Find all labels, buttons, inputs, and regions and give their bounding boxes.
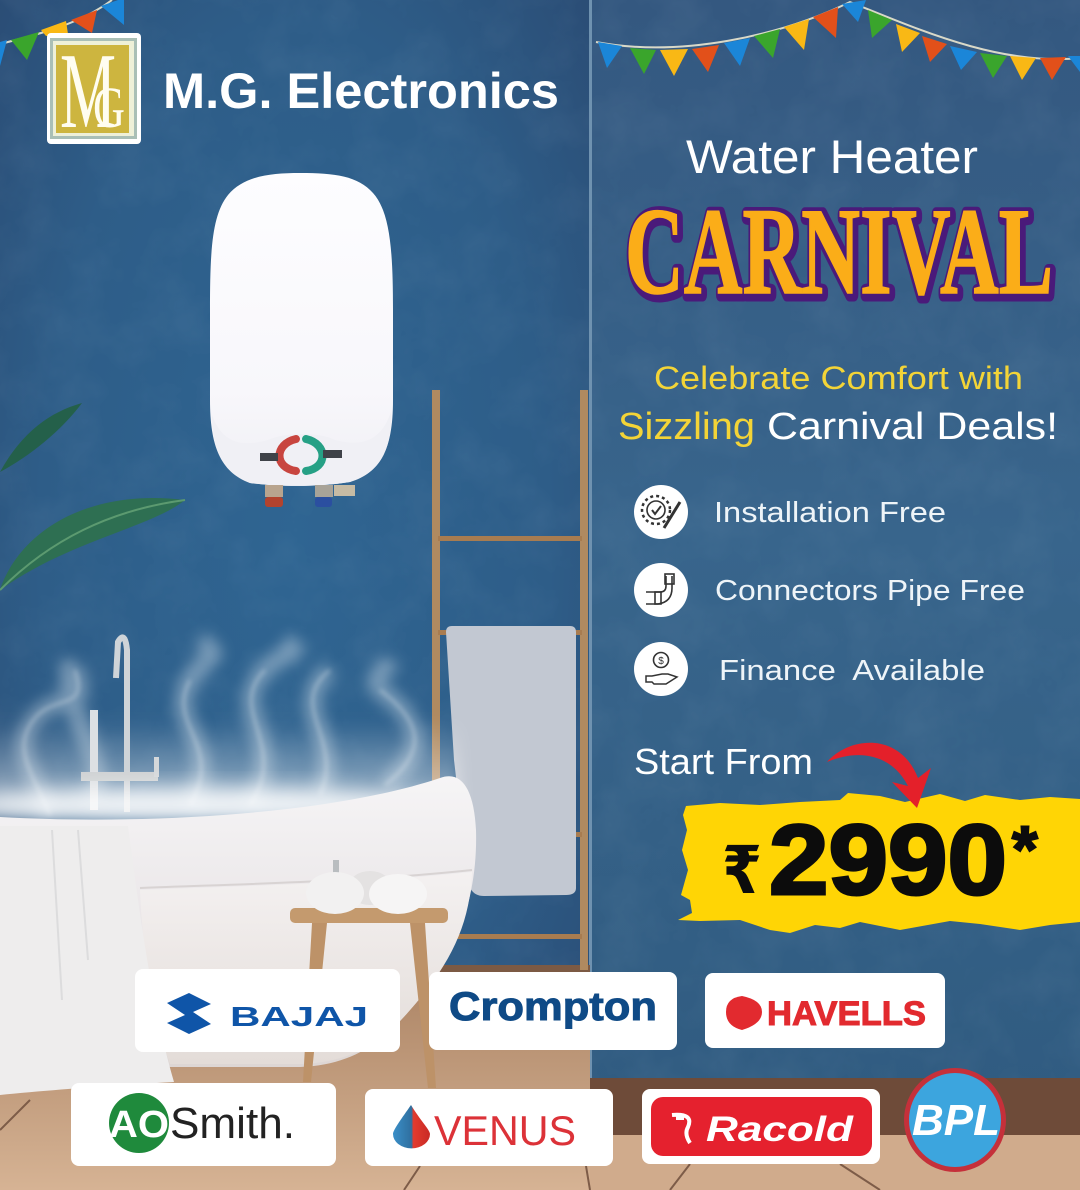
brand: AO Smith: Smith. xyxy=(170,1099,295,1148)
price: 2990 xyxy=(769,804,1007,915)
icon: pipe xyxy=(634,563,688,617)
logo: M.G. monogram: G xyxy=(93,75,125,140)
wooden stool xyxy=(290,908,448,1088)
tagline: Sizzling xyxy=(618,406,755,448)
tagline: Carnival Deals! xyxy=(767,406,1058,448)
heading: Water Heater: Water Heater xyxy=(686,130,978,183)
icon: gear and wrench xyxy=(634,485,688,539)
feature: installation free xyxy=(634,485,946,539)
icon: Bajaj hexagon xyxy=(167,993,211,1034)
arrow xyxy=(827,743,931,808)
brand: Venus: VENUS xyxy=(434,1107,576,1154)
price: * xyxy=(1012,812,1038,886)
brand: Bajaj xyxy=(135,969,400,1052)
bathtub xyxy=(0,776,476,1067)
tagline xyxy=(618,360,1058,448)
icon: AO green circle xyxy=(109,1093,169,1153)
brand: AO Smith: AO xyxy=(109,1104,169,1146)
brand name: M.G. Electronics xyxy=(163,63,559,119)
decorative vases xyxy=(306,860,427,914)
icon: Racold mark xyxy=(672,1115,690,1143)
feature: installation free: Installation Free xyxy=(714,497,946,529)
product: water heater xyxy=(210,173,393,507)
ladder towel rack xyxy=(432,390,588,970)
brand: Racold: Racold xyxy=(706,1110,854,1149)
faucet xyxy=(81,638,159,812)
feature: connectors pipe free xyxy=(634,563,1025,617)
icon: coin and hand: $ xyxy=(658,656,664,667)
price banner xyxy=(678,793,1080,933)
icon: Havells hammer mark xyxy=(726,996,762,1030)
brand: BPL: BPL xyxy=(912,1096,1000,1145)
start from label: Start From xyxy=(634,741,813,782)
brand: AO Smith xyxy=(71,1083,336,1166)
tagline: Celebrate Comfort with xyxy=(654,360,1023,396)
feature: finance available xyxy=(634,642,985,696)
plant leaves xyxy=(0,403,185,590)
brand: Crompton: Crompton xyxy=(449,985,657,1029)
brand: Venus xyxy=(365,1089,613,1166)
brand: Bajaj: BAJAJ xyxy=(230,1001,368,1032)
logo: M.G. monogram: M xyxy=(60,32,116,151)
price xyxy=(722,804,1038,915)
bunting: left xyxy=(0,0,124,66)
brand: Crompton xyxy=(429,972,677,1050)
icon: water drop xyxy=(393,1105,430,1148)
brand: Havells: HAVELLS xyxy=(767,995,926,1033)
brand: Racold xyxy=(642,1089,880,1164)
floor and skirting xyxy=(0,965,1080,1190)
brand: Havells xyxy=(705,973,945,1048)
draped white towel xyxy=(0,826,174,1095)
steam base glow xyxy=(0,788,440,822)
bunting: right xyxy=(596,0,1080,80)
steam xyxy=(0,640,460,815)
brand: BPL xyxy=(904,1068,1006,1172)
feature: connectors pipe free: Connectors Pipe Free xyxy=(715,575,1025,607)
feature: finance available: Finance Available xyxy=(719,655,985,687)
hanging towel xyxy=(446,626,576,896)
icon: coin and hand xyxy=(634,642,688,696)
price: ₹ xyxy=(722,817,762,913)
